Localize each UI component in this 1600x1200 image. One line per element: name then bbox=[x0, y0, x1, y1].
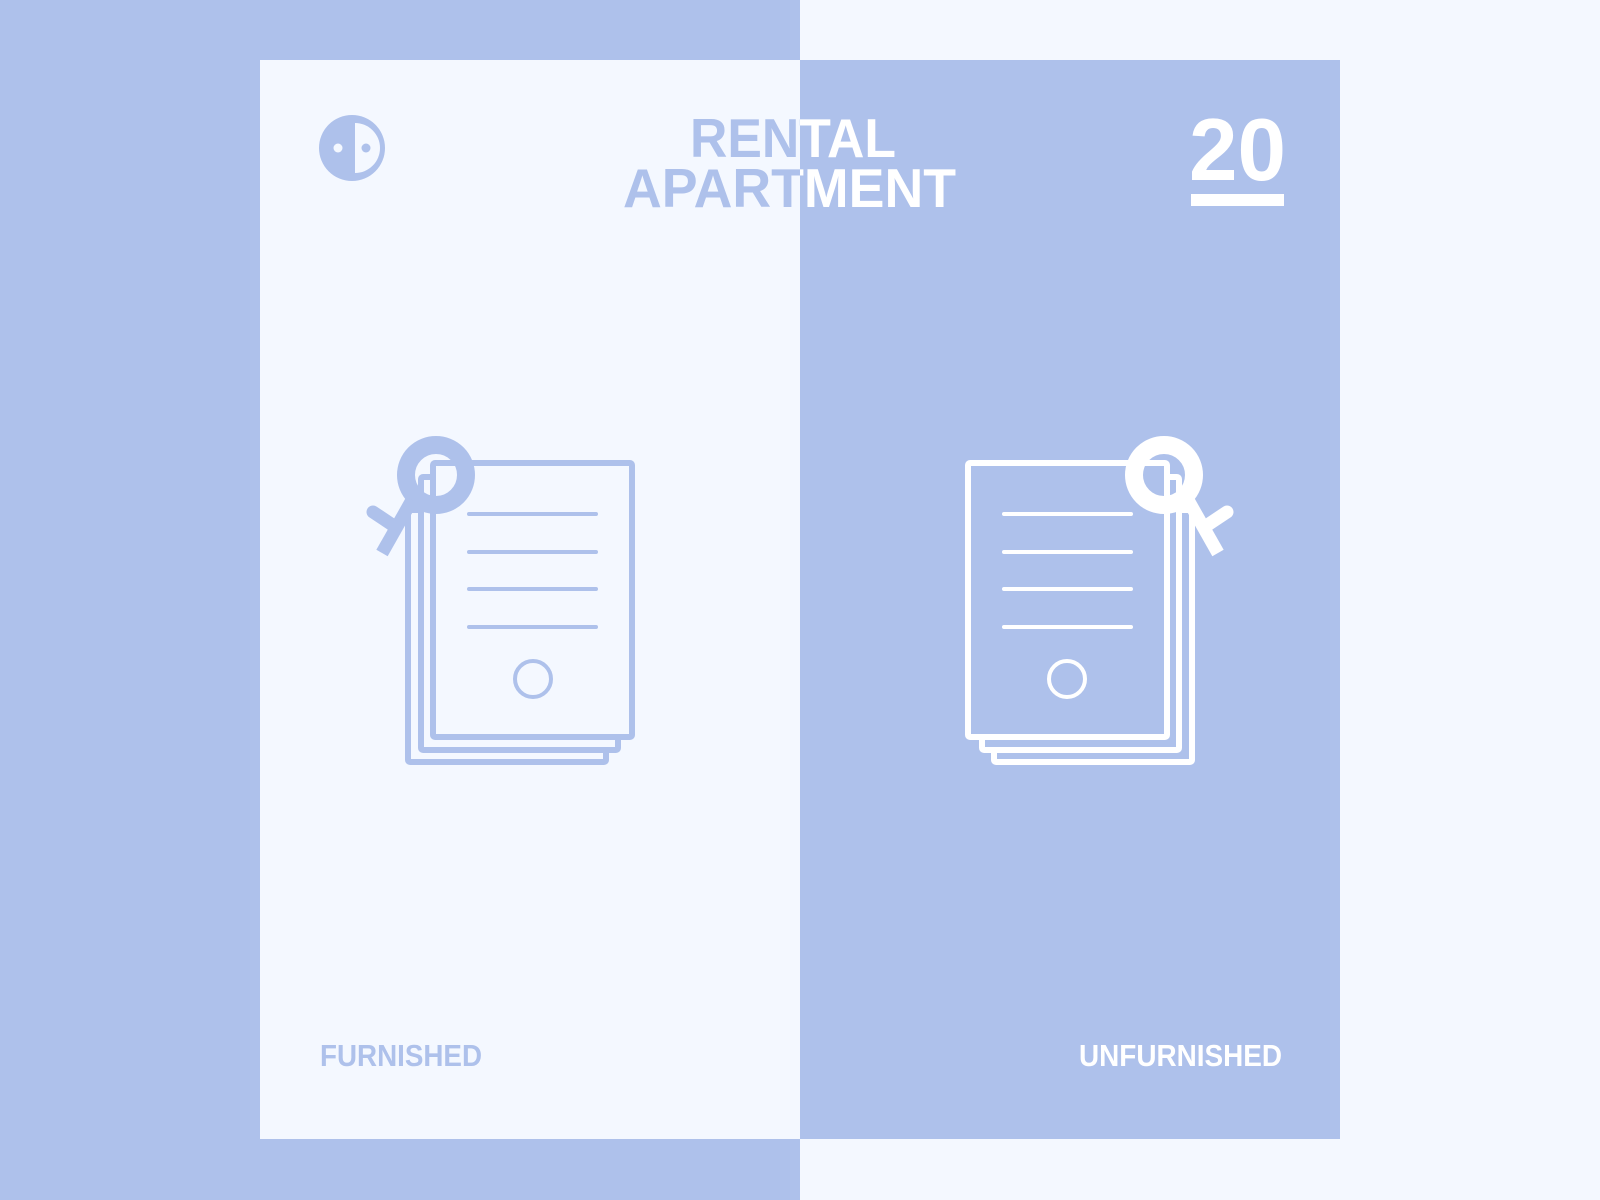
icon: furnished document with key bbox=[373, 445, 632, 762]
title: RENTAL bbox=[690, 107, 896, 169]
title: APARTMENT bbox=[623, 157, 956, 219]
title: APARTMENT bbox=[623, 157, 956, 219]
icon: unfurnished document with key bbox=[968, 445, 1227, 762]
logo icon bbox=[319, 115, 385, 181]
number 20: 20 bbox=[1189, 100, 1286, 199]
title bbox=[624, 119, 956, 208]
title: RENTAL bbox=[690, 107, 896, 169]
label: furnished: FURNISHED bbox=[320, 1038, 482, 1073]
label: unfurnished: UNFURNISHED bbox=[1079, 1038, 1282, 1073]
